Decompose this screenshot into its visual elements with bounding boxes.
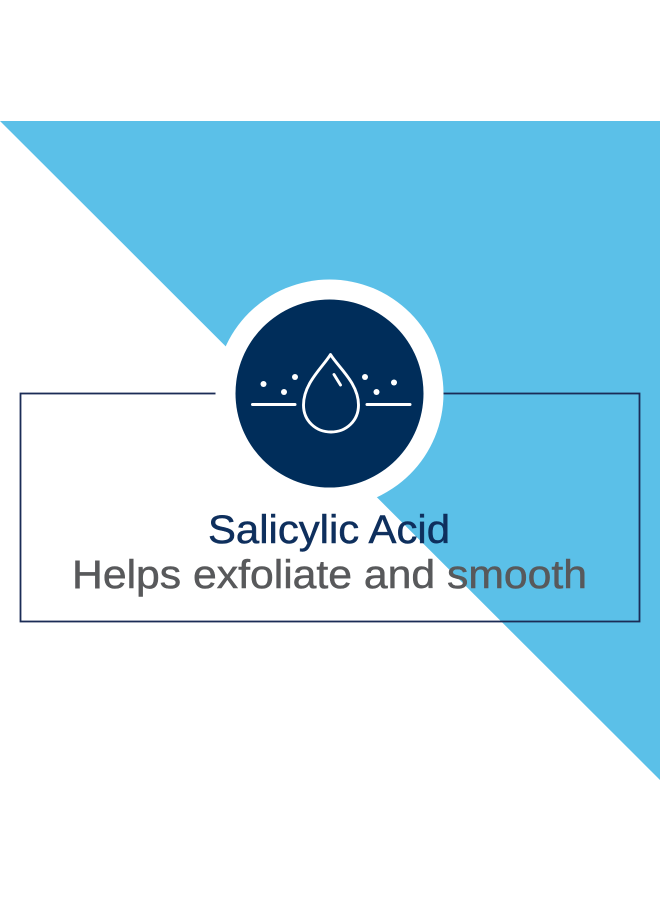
subheading: Helps exfoliate and smooth xyxy=(72,553,587,597)
icon: exfoliated particles xyxy=(260,374,397,395)
icon: salicylic acid droplet badge xyxy=(236,300,424,488)
outlined text frame xyxy=(20,394,640,622)
blue diagonal triangle background xyxy=(0,121,660,780)
navy icon disc xyxy=(236,300,424,488)
heading: Salicylic Acid xyxy=(208,508,450,552)
white ring behind icon xyxy=(216,280,444,508)
icon: water drop xyxy=(304,354,358,432)
icon: skin surface lines xyxy=(252,403,410,406)
